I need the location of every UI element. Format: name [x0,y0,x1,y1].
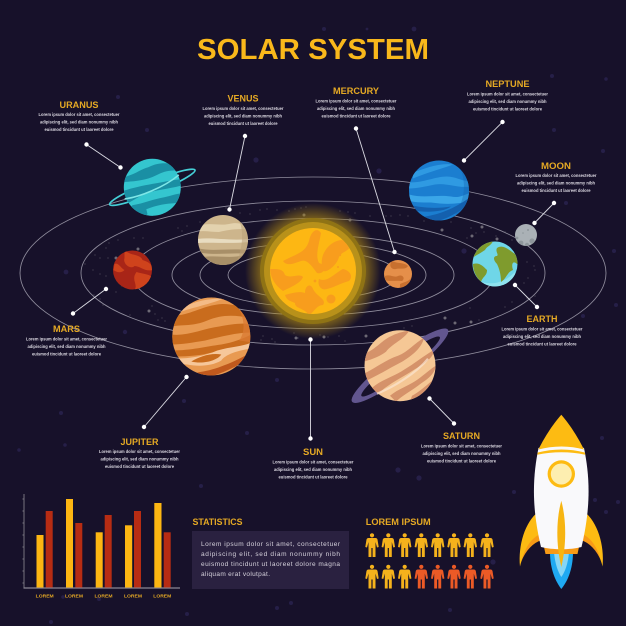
label: neptune [467,79,548,112]
label: neptune: adipiscing elit, sed diam nonummy nibh [468,99,547,104]
label: neptune: NEPTUNE [486,79,530,90]
label: earth [502,314,583,346]
pictogram: lorem ipsum [365,517,494,588]
chart axis labels: LOREM [36,594,54,599]
bar chart [22,494,180,599]
statistics panel: adipiscing elit, sed diam nonummy nibh [201,551,340,558]
label: earth: EARTH [526,314,558,325]
label: uranus: adipiscing elit, sed diam nonummy nibh [40,120,118,124]
planet: saturn [352,328,448,403]
connector: jupiter [142,375,189,429]
label: venus: adipiscing elit, sed diam nonummy nibh [204,114,282,118]
label: venus: euismod tincidunt ut laoreet dolore [208,121,278,126]
connector: venus [227,134,247,212]
label: mercury [316,86,397,118]
chart axis labels [36,594,171,599]
label: jupiter: adipiscing elit, sed diam nonummy nibh [100,456,179,462]
label: sun: SUN [303,447,323,458]
label: neptune: euismod tincidunt ut laoreet dolore [473,106,543,112]
connector: neptune [462,120,505,163]
label: earth: adipiscing elit, sed diam nonummy nibh [503,334,581,339]
label: earth: euismod tincidunt ut laoreet dolore [508,342,577,346]
label: mars: adipiscing elit, sed diam nonummy nibh [28,344,106,349]
label: mercury: euismod tincidunt ut laoreet dolore [322,114,391,118]
planet: venus [197,215,251,266]
label: jupiter [99,437,180,469]
label: moon: Lorem ipsum dolor sit amet, consectetuer [516,173,597,178]
statistics panel [192,517,349,589]
label: mercury: MERCURY [333,86,380,97]
planet: jupiter [171,298,253,378]
connector: uranus [84,142,123,170]
label: moon: MOON [541,161,571,172]
statistics panel: STATISTICS [192,517,242,528]
planet: neptune [409,160,471,222]
asteroid belt [85,207,535,343]
planet: mercury [384,260,412,288]
label: sun: adipiscing elit, sed diam nonummy nibh [274,467,352,472]
chart axis labels: LOREM [124,594,142,599]
pictogram: lorem ipsum: LOREM IPSUM [366,517,431,528]
planet: moon [515,224,537,247]
label: venus: VENUS [228,94,258,104]
label: earth: Lorem ipsum dolor sit amet, consectetuer [502,326,583,332]
planet: mars [113,250,152,290]
connector: saturn [427,396,456,426]
label: saturn: SATURN [443,431,480,442]
label: saturn: Lorem ipsum dolor sit amet, consectetuer [421,444,502,448]
planet: earth [472,241,518,288]
orbits [20,177,606,369]
label: venus: Lorem ipsum dolor sit amet, consectetuer [202,106,284,111]
sun [245,203,381,339]
label: mars: MARS [53,324,80,335]
label: saturn: euismod tincidunt ut laoreet dolore [427,458,497,464]
label: jupiter: JUPITER [120,437,159,448]
label: jupiter: Lorem ipsum dolor sit amet, consectetuer [99,449,180,454]
connector: moon [532,201,556,225]
label: mars: Lorem ipsum dolor sit amet, consectetuer [26,336,107,342]
label: sun: euismod tincidunt ut laoreet dolore [278,474,348,480]
label: sun [272,447,354,480]
label: jupiter: euismod tincidunt ut laoreet dolore [105,464,175,469]
chart axis labels: LOREM [153,594,171,599]
chart axis labels: LOREM [94,594,113,599]
label: moon [516,161,597,193]
title: SOLAR SYSTEM [197,34,429,66]
statistics panel: aliquam erat volutpat. [201,571,270,578]
label: saturn [421,431,502,464]
label: saturn: adipiscing elit, sed diam nonummy nibh [422,451,501,456]
label: moon: adipiscing elit, sed diam nonummy nibh [517,180,595,186]
label: uranus: Lorem ipsum dolor sit amet, consectetuer [38,112,120,117]
label: moon: euismod tincidunt ut laoreet dolore [522,188,591,193]
label: uranus [38,100,120,132]
connector: sun [308,337,313,441]
label: sun: Lorem ipsum dolor sit amet, consectetuer [272,460,354,464]
rocket [520,415,603,589]
label: uranus: URANUS [60,100,98,111]
label: mars [26,324,107,356]
statistics panel: euismod tincidunt ut laoreet dolore magna [201,561,340,568]
label: mercury: Lorem ipsum dolor sit amet, consectetuer [316,98,397,104]
statistics panel: Lorem ipsum dolor sit amet, consectetuer [201,541,341,548]
label: uranus: euismod tincidunt ut laoreet dolore [44,127,114,132]
label: venus [202,94,284,126]
label: neptune: Lorem ipsum dolor sit amet, consectetuer [467,92,548,96]
connector: mars [71,287,108,316]
connector: mercury [354,126,397,254]
planet: uranus [107,159,197,219]
connector: earth [513,283,539,309]
chart axis labels: LOREM [65,594,83,599]
label: mercury: adipiscing elit, sed diam nonummy nibh [317,106,395,111]
label: mars: euismod tincidunt ut laoreet dolore [32,352,102,356]
